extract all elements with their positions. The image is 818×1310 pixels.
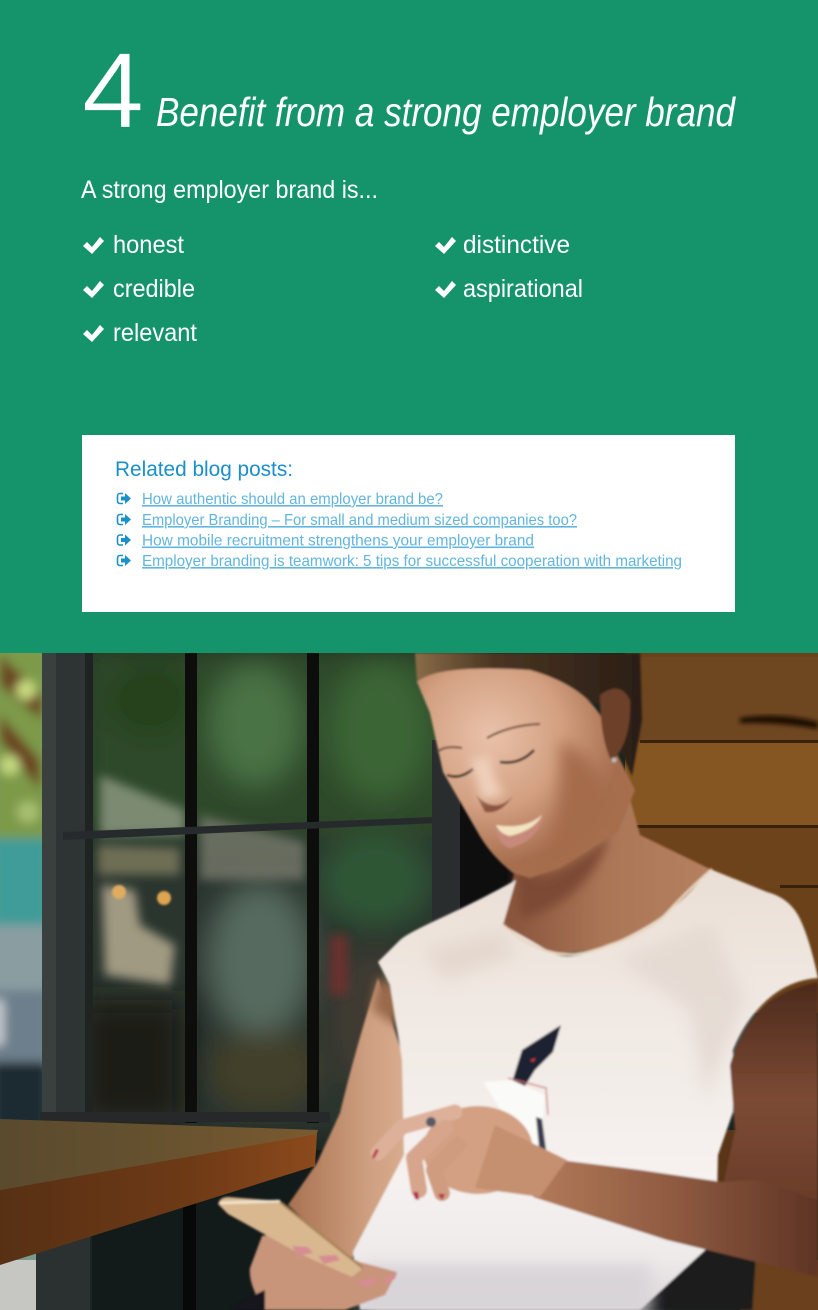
hand on shirt <box>372 1106 567 1200</box>
shirt bird print <box>483 1025 561 1157</box>
phone <box>218 1197 363 1277</box>
item: credible <box>83 275 195 303</box>
item: relevant: relevant <box>113 319 197 347</box>
lower hand <box>250 1233 397 1310</box>
neckline trim <box>503 869 712 954</box>
shirt <box>353 869 818 1310</box>
item: distinctive: distinctive <box>463 231 570 259</box>
left arm <box>288 978 405 1262</box>
photo: smiling woman using a smartphone in a cafe <box>0 645 818 1310</box>
window panes with blurred reflections <box>80 645 480 1135</box>
link 3: How mobile recruitment strengthens your employer brand <box>142 532 534 550</box>
item: credible: credible <box>113 275 195 303</box>
link 2: Employer Branding – For small and medium sized companies too? <box>142 512 577 529</box>
heading: section number and title: Benefit from a strong employer brand <box>156 89 736 135</box>
reflected awning and lights <box>98 775 348 995</box>
ear <box>600 689 630 762</box>
heading: related blog posts: Related blog posts: <box>115 457 293 481</box>
chair <box>640 1230 756 1310</box>
item: honest <box>83 231 184 259</box>
smile <box>494 812 544 848</box>
dark lower-left pane <box>80 1000 185 1125</box>
nose shadow <box>476 795 513 812</box>
wooden wall <box>625 653 818 1310</box>
link 1: How authentic should an employer brand be? <box>142 491 443 508</box>
panel: related blog posts <box>82 435 735 612</box>
shirt shading <box>365 925 745 1310</box>
checklist of attributes <box>83 231 583 347</box>
link 4: Employer branding is teamwork: 5 tips for successful cooperation with marketing <box>142 553 682 570</box>
green background panel <box>0 0 818 653</box>
heading: section number and title: 4 <box>82 30 144 150</box>
window frame and mullions <box>40 653 520 1123</box>
table <box>0 1119 322 1310</box>
face <box>417 668 635 878</box>
outdoor view at far left <box>0 645 48 1310</box>
eyebrows <box>437 724 540 752</box>
intro text: A strong employer brand is... <box>81 176 378 204</box>
eyes <box>447 750 534 777</box>
item: aspirational: aspirational <box>463 275 583 303</box>
right forearm <box>533 1160 818 1277</box>
item: honest: honest <box>113 231 184 259</box>
hair <box>415 653 642 776</box>
heading: section number and title <box>82 30 736 150</box>
woman <box>218 653 818 1310</box>
right upper arm <box>722 982 818 1277</box>
neck <box>500 770 712 955</box>
